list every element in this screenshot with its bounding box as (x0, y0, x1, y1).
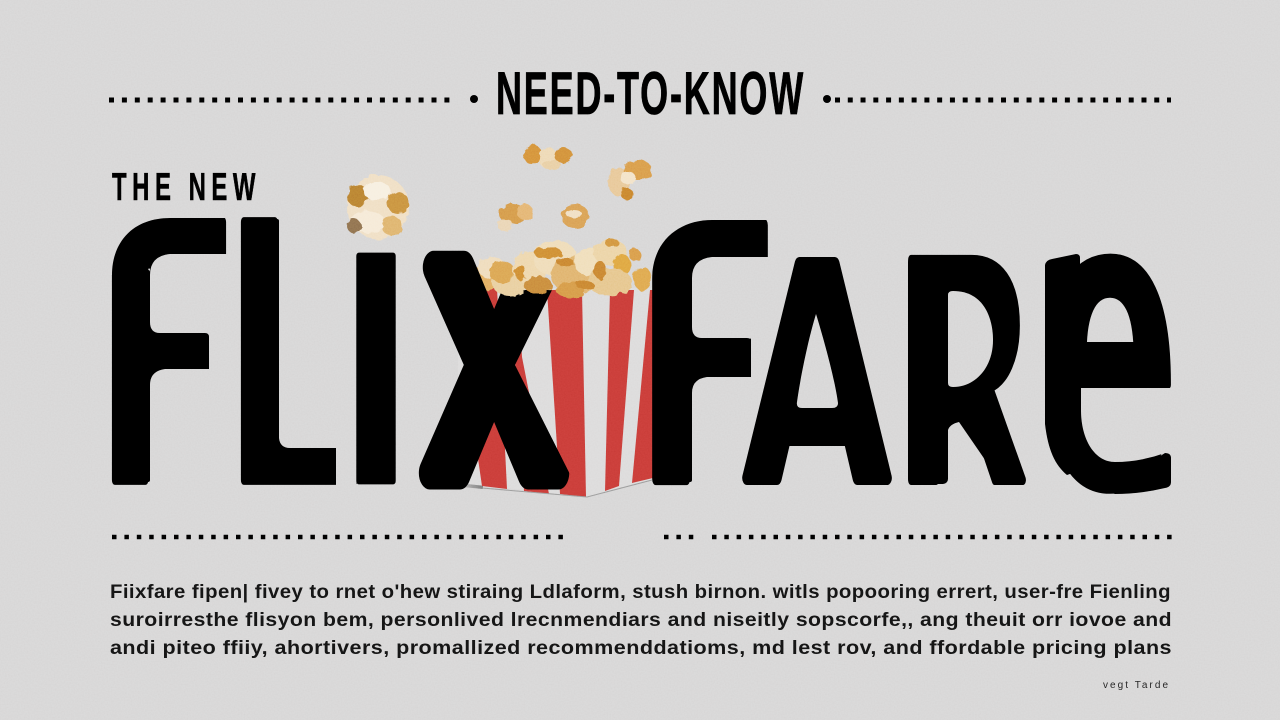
body text (110, 581, 1172, 659)
icon: popcorn pile (489, 239, 652, 298)
icon: flying popcorn (347, 145, 652, 239)
title: flix (100, 141, 772, 560)
top dotted rule left (109, 95, 478, 103)
body line 2: suroirresthe flisyon bem, personlived lrecnmendiars and niseitly sopscorfe,, ang theuit orr iovoe and (110, 609, 1172, 631)
popcorn pile rear left (466, 257, 506, 293)
box bottom edge (482, 480, 652, 497)
letter L: L (229, 141, 362, 560)
letter X: X (428, 202, 560, 537)
credit: vegt Tarde (1103, 680, 1168, 691)
title: letters A R E (742, 102, 1177, 576)
letter A: A (742, 197, 893, 545)
bottom dotted rule right (664, 535, 1172, 539)
top dotted rule right (823, 95, 1171, 103)
subtitle: the new: THE NEW (112, 166, 261, 209)
body line 3: andi piteo ffiiy, ahortivers, promallized recommenddatioms, md lest rov, and ffordable pricing plans (110, 637, 1172, 659)
popcorn kernel right (608, 160, 652, 200)
box body (458, 288, 652, 497)
body line 1: Fiixfare fipen| fivey to rnet o'hew stiraing Ldlaform, stush birnon. witls popooring errert, user-fre Fienling (110, 581, 1171, 603)
letter e: e (1039, 102, 1177, 576)
poster (109, 71, 1172, 690)
popcorn kernel top (524, 145, 572, 170)
popcorn box (452, 288, 653, 497)
popcorn kernel mid left (497, 204, 533, 231)
title: letters I and X (356, 250, 570, 490)
box shadow (452, 470, 483, 489)
popcorn kernel mid right (561, 204, 589, 228)
letter F second: F (641, 145, 772, 557)
popcorn kernel large (347, 175, 409, 239)
letter R: R (899, 190, 1027, 548)
letter I: I (343, 185, 409, 551)
bottom dotted rule left (112, 535, 566, 539)
heading: need-to-know: NEED-TO-KNOW (496, 60, 805, 127)
red stripes (453, 288, 653, 497)
letter F: F (100, 141, 231, 560)
